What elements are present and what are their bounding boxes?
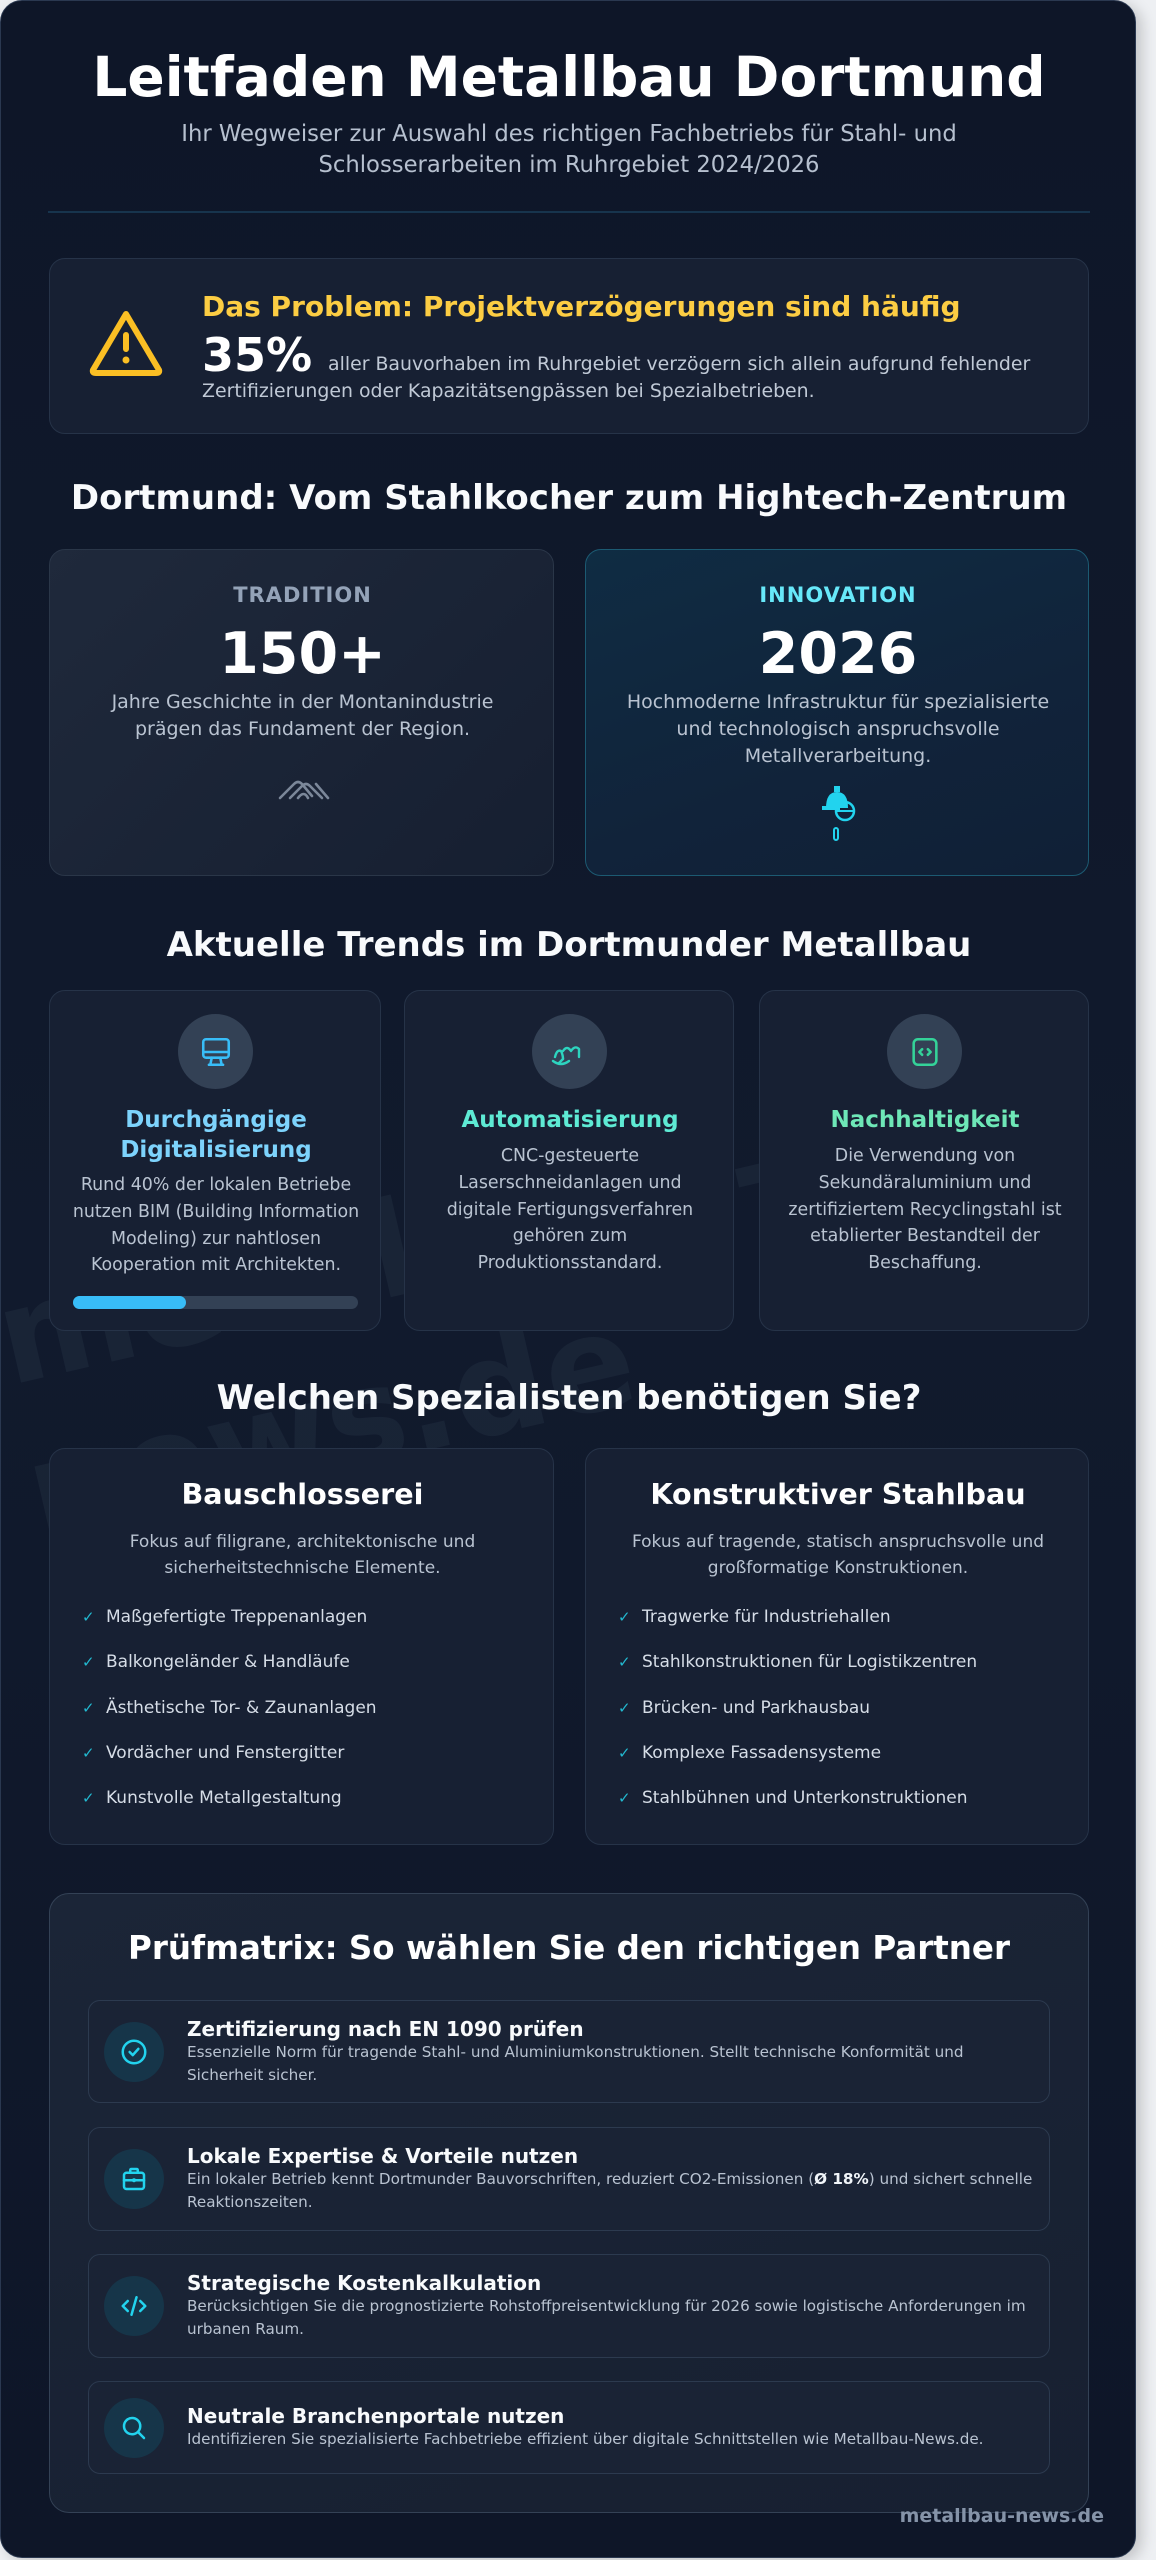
heading: trends: Aktuelle Trends im Dortmunder Metallbau	[167, 925, 971, 965]
problem text: Zertifizierungen oder Kapazitätsengpässen bei Spezialbetrieben.	[202, 380, 815, 402]
panel: trend digitalisierung	[49, 990, 381, 1331]
footer: source: metallbau-news.de	[900, 2505, 1104, 2527]
checklist: Kunstvolle Metallgestaltung	[106, 1788, 342, 1808]
checklist: Tragwerke für Industriehallen	[642, 1607, 891, 1627]
checklist: ✓	[82, 1608, 95, 1626]
check item: Kostenkalkulation: Strategische Kostenkalkulation	[187, 2271, 541, 2295]
panel: trend automatisierung	[404, 990, 734, 1331]
checklist: Stahlbühnen und Unterkonstruktionen	[642, 1788, 968, 1808]
tradition text: Jahre Geschichte in der Montanindustrie	[112, 691, 493, 713]
trend text: Die Verwendung von	[835, 1146, 1015, 1166]
tradition text: prägen das Fundament der Region.	[135, 718, 470, 740]
trend text: gehören zum	[513, 1226, 627, 1246]
panel: Bauschlosserei	[49, 1448, 554, 1845]
specialist title: Bauschlosserei	[182, 1477, 423, 1511]
checklist	[82, 1607, 377, 1808]
checklist: Balkongeländer & Handläufe	[106, 1652, 350, 1672]
check item: Kostenkalkulation	[88, 2254, 1050, 2358]
trend title	[120, 1107, 312, 1163]
innovation text: und technologisch anspruchsvolle	[676, 718, 1000, 740]
trend text: Produktionsstandard.	[478, 1253, 662, 1273]
trend text	[73, 1175, 359, 1275]
check item: EN 1090: Sicherheit sicher.	[187, 2066, 317, 2084]
checklist: ✓	[618, 1789, 631, 1807]
checklist: ✓	[618, 1699, 631, 1717]
subtitle: Schlosserarbeiten im Ruhrgebiet 2024/2026	[318, 152, 820, 178]
checklist: ✓	[82, 1789, 95, 1807]
trend title: Digitalisierung	[120, 1137, 312, 1163]
specialist description: großformatige Konstruktionen.	[708, 1558, 968, 1578]
icon: briefcase	[104, 2149, 164, 2209]
Prüfmatrix heading: Prüfmatrix: So wählen Sie den richtigen Partner	[128, 1929, 1010, 1967]
checklist: Brücken- und Parkhausbau	[642, 1698, 870, 1718]
trend text: zertifiziertem Recyclingstahl ist	[788, 1200, 1062, 1220]
trend title: Nachhaltigkeit	[830, 1107, 1020, 1133]
trend text: CNC-gesteuerte	[501, 1146, 639, 1166]
title: Leitfaden Metallbau Dortmund	[92, 45, 1046, 109]
checklist: Ästhetische Tor- & Zaunanlagen	[106, 1698, 377, 1718]
checklist: ✓	[618, 1653, 631, 1671]
icon: code	[104, 2276, 164, 2336]
icon: check circle	[104, 2022, 164, 2082]
trend text: Laserschneidanlagen und	[458, 1173, 682, 1193]
trend title: Automatisierung	[461, 1107, 679, 1133]
panel: Prüfmatrix	[49, 1893, 1089, 2513]
checklist: ✓	[618, 1608, 631, 1626]
label innovation: INNOVATION	[759, 583, 917, 607]
checklist: ✓	[82, 1744, 95, 1762]
panel: trend nachhaltigkeit	[759, 990, 1089, 1331]
subtitle: Ihr Wegweiser zur Auswahl des richtigen Fachbetriebs für Stahl- und	[181, 121, 957, 147]
stat 35%: 35%	[202, 328, 312, 382]
check item: lokale Expertise	[88, 2127, 1050, 2231]
panel: problem	[49, 258, 1089, 434]
trend text	[447, 1146, 693, 1273]
innovation text: Metallverarbeitung.	[745, 745, 931, 767]
icon: handshake	[278, 780, 330, 800]
check item: lokale Expertise: Ein lokaler Betrieb kennt Dortmunder Bauvorschriften, reduziert CO2-Emissionen (Ø 18%) und sichert schnelle	[187, 2170, 1032, 2188]
specialist description: Fokus auf tragende, statisch anspruchsvolle und	[632, 1532, 1044, 1552]
trend text	[788, 1146, 1062, 1273]
heading: Dortmund: Dortmund: Vom Stahlkocher zum Hightech-Zentrum	[71, 478, 1067, 518]
trend text: Kooperation mit Architekten.	[91, 1255, 341, 1275]
trend text: digitale Fertigungsverfahren	[447, 1200, 693, 1220]
check item: Kostenkalkulation: Berücksichtigen Sie die prognostizierte Rohstoffpreisentwicklung für 2026 sowie logistische Anforderungen im	[187, 2297, 1026, 2315]
check item: Branchenportale: Neutrale Branchenportale nutzen	[187, 2404, 564, 2428]
checklist: Vordächer und Fenstergitter	[106, 1743, 344, 1763]
check item: lokale Expertise: Reaktionszeiten.	[187, 2193, 313, 2211]
innovation text	[627, 691, 1049, 767]
icon: warning triangle	[90, 311, 162, 376]
progress bar 40%	[73, 1296, 358, 1309]
check item: Branchenportale	[88, 2381, 1050, 2474]
trend text: Modeling) zur nahtlosen	[111, 1229, 321, 1249]
innovation text: Hochmoderne Infrastruktur für spezialisierte	[627, 691, 1049, 713]
specialist description: sicherheitstechnische Elemente.	[164, 1558, 441, 1578]
number 2026: 2026	[759, 621, 917, 687]
check item: lokale Expertise: Lokale Expertise & Vorteile nutzen	[187, 2144, 578, 2168]
check item: EN 1090	[88, 2000, 1050, 2103]
problem heading: Das Problem: Projektverzögerungen sind häufig	[202, 290, 961, 323]
check item: EN 1090: Essenzielle Norm für tragende Stahl- und Aluminiumkonstruktionen. Stellt technische Konformität und	[187, 2042, 964, 2060]
icon: monitor	[178, 1014, 253, 1089]
checklist: Maßgefertigte Treppenanlagen	[106, 1607, 367, 1627]
label tradition: TRADITION	[233, 583, 372, 607]
checklist	[618, 1607, 977, 1808]
icon: search	[104, 2398, 164, 2458]
problem text	[202, 353, 1030, 402]
specialist description	[632, 1532, 1044, 1578]
specialist description	[130, 1532, 475, 1578]
trend text: Beschaffung.	[868, 1253, 982, 1273]
trend text: etablierter Bestandteil der	[810, 1226, 1040, 1246]
panel: tradition	[49, 549, 554, 876]
icon: code square	[887, 1014, 962, 1089]
problem text: aller Bauvorhaben im Ruhrgebiet verzögern sich allein aufgrund fehlender	[328, 353, 1030, 375]
check item: Branchenportale: Identifizieren Sie spezialisierte Fachbetriebe effizient über digitale Schnittstellen wie Metallbau-News.de.	[187, 2430, 984, 2448]
trend text: nutzen BIM (Building Information	[73, 1202, 359, 1222]
trend text: Sekundäraluminium und	[819, 1173, 1031, 1193]
watermark: metallbau-: metallbau-	[0, 1086, 799, 1416]
number 150+: 150+	[219, 621, 386, 687]
panel: innovation	[585, 549, 1089, 876]
trend title: Durchgängige	[125, 1107, 307, 1133]
trend text: Rund 40% der lokalen Betriebe	[81, 1175, 351, 1195]
check item: Kostenkalkulation: urbanen Raum.	[187, 2320, 304, 2338]
specialist description: Fokus auf filigrane, architektonische und	[130, 1532, 475, 1552]
checklist: ✓	[618, 1744, 631, 1762]
checklist: ✓	[82, 1653, 95, 1671]
tradition text	[110, 691, 493, 740]
check item: EN 1090: Zertifizierung nach EN 1090 prüfen	[187, 2016, 584, 2040]
icon: robot hand	[532, 1014, 607, 1089]
subtitle	[181, 121, 957, 178]
icon: lightbulb robot	[822, 786, 856, 841]
checklist: Stahlkonstruktionen für Logistikzentren	[642, 1652, 977, 1672]
watermark: news.de: news.de	[13, 1281, 649, 1571]
checklist: Komplexe Fassadensysteme	[642, 1743, 881, 1763]
specialist title: Konstruktiver Stahlbau	[650, 1477, 1026, 1511]
checklist: ✓	[82, 1699, 95, 1717]
heading: specialists: Welchen Spezialisten benötigen Sie?	[217, 1378, 921, 1418]
panel: Konstruktiver Stahlbau	[585, 1448, 1089, 1845]
